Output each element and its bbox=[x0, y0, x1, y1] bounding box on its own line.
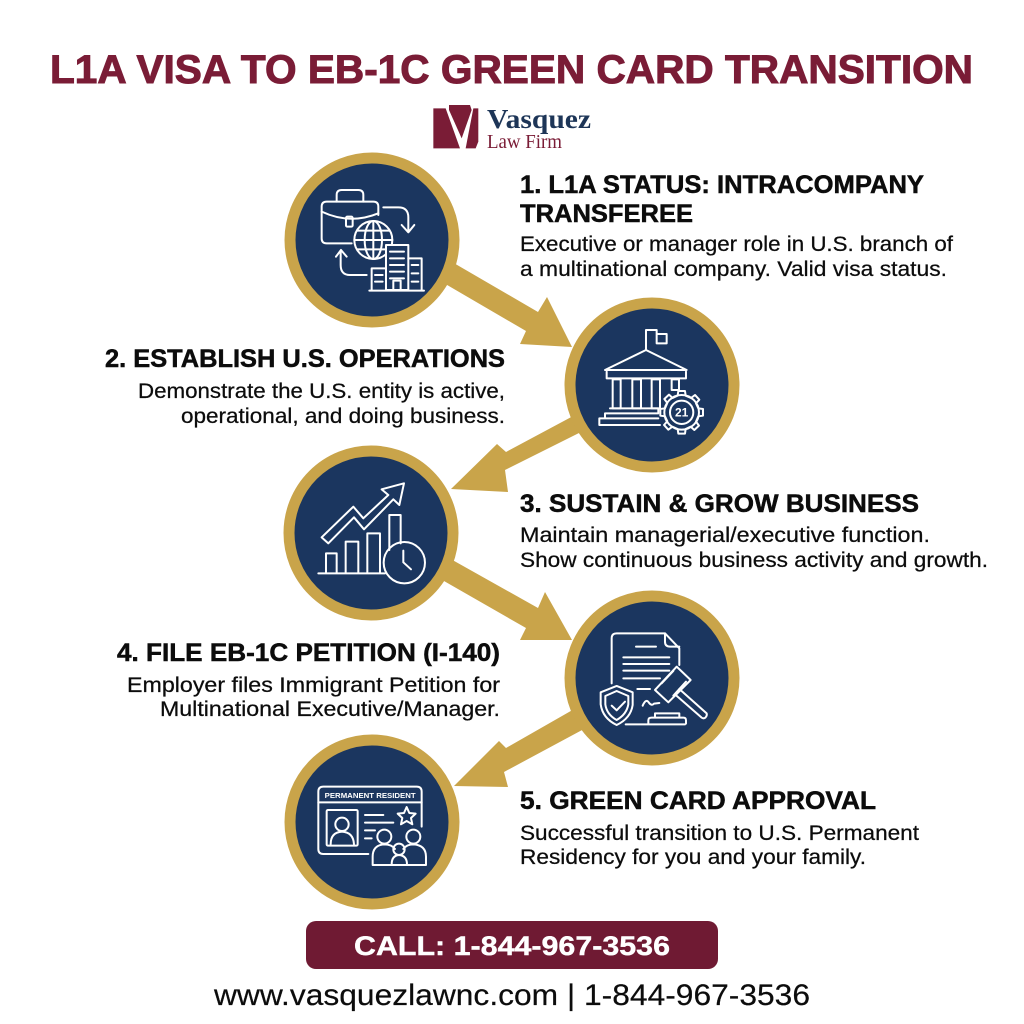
step 1 text: TRANSFEREE bbox=[520, 200, 693, 228]
call to action button: CALL: 1-844-967-3536 bbox=[354, 931, 670, 961]
arrow: step 2 to step 3 bbox=[451, 407, 595, 492]
step 4 text bbox=[117, 639, 500, 721]
step 1 text: a multinational company. Valid visa status. bbox=[520, 258, 947, 281]
arrow: step 4 to step 5 bbox=[454, 700, 597, 787]
step 1 circle icon: briefcase, globe and buildings bbox=[290, 158, 454, 322]
step 4 text: Multinational Executive/Manager. bbox=[160, 698, 500, 721]
arrow: step 3 to step 4 bbox=[430, 553, 572, 640]
step 1 text: 1. L1A STATUS: INTRACOMPANY bbox=[520, 171, 924, 199]
step 5 text: Successful transition to U.S. Permanent bbox=[520, 822, 919, 845]
arrow: step 1 to step 2 bbox=[430, 255, 572, 347]
step 5 text: Residency for you and your family. bbox=[520, 846, 866, 869]
step 2 circle icon: government building and gear bbox=[570, 303, 734, 467]
call to action button bbox=[306, 921, 718, 969]
step 3 text: Show continuous business activity and growth. bbox=[520, 549, 988, 572]
step 2 text: 2. ESTABLISH U.S. OPERATIONS bbox=[105, 345, 505, 373]
step 5 text: 5. GREEN CARD APPROVAL bbox=[520, 787, 876, 815]
step 4 text: Employer files Immigrant Petition for bbox=[127, 674, 500, 697]
step 2 text: operational, and doing business. bbox=[181, 405, 505, 428]
logo: Vasquez Law Firm: Law Firm bbox=[487, 131, 562, 153]
step 2 circle icon: government building and gear: 21 bbox=[675, 406, 689, 420]
title: L1A VISA TO EB-1C GREEN CARD TRANSITION bbox=[50, 48, 973, 92]
step 5 circle icon: permanent resident card and family bbox=[290, 740, 454, 904]
step 1 text bbox=[520, 171, 953, 281]
step 4 text: 4. FILE EB-1C PETITION (I-140) bbox=[117, 639, 500, 667]
step 1 text: Executive or manager role in U.S. branch of bbox=[520, 233, 953, 256]
step 2 text bbox=[105, 345, 505, 428]
logo: Vasquez Law Firm: Vasquez bbox=[487, 104, 591, 134]
step 4 circle icon: document, shield and gavel bbox=[570, 596, 734, 760]
step 3 text: 3. SUSTAIN & GROW BUSINESS bbox=[520, 490, 919, 518]
step 2 text: Demonstrate the U.S. entity is active, bbox=[138, 380, 505, 403]
step 3 text: Maintain managerial/executive function. bbox=[520, 524, 930, 547]
step 3 circle icon: growth chart and clock bbox=[289, 451, 453, 615]
step 5 circle icon: permanent resident card and family: PERMANENT RESIDENT bbox=[325, 791, 416, 800]
step 3 text bbox=[520, 490, 988, 572]
step 5 text bbox=[520, 787, 919, 869]
logo: Vasquez Law Firm bbox=[433, 104, 591, 153]
footer website and phone: www.vasquezlawnc.com | 1-844-967-3536 bbox=[213, 979, 810, 1012]
